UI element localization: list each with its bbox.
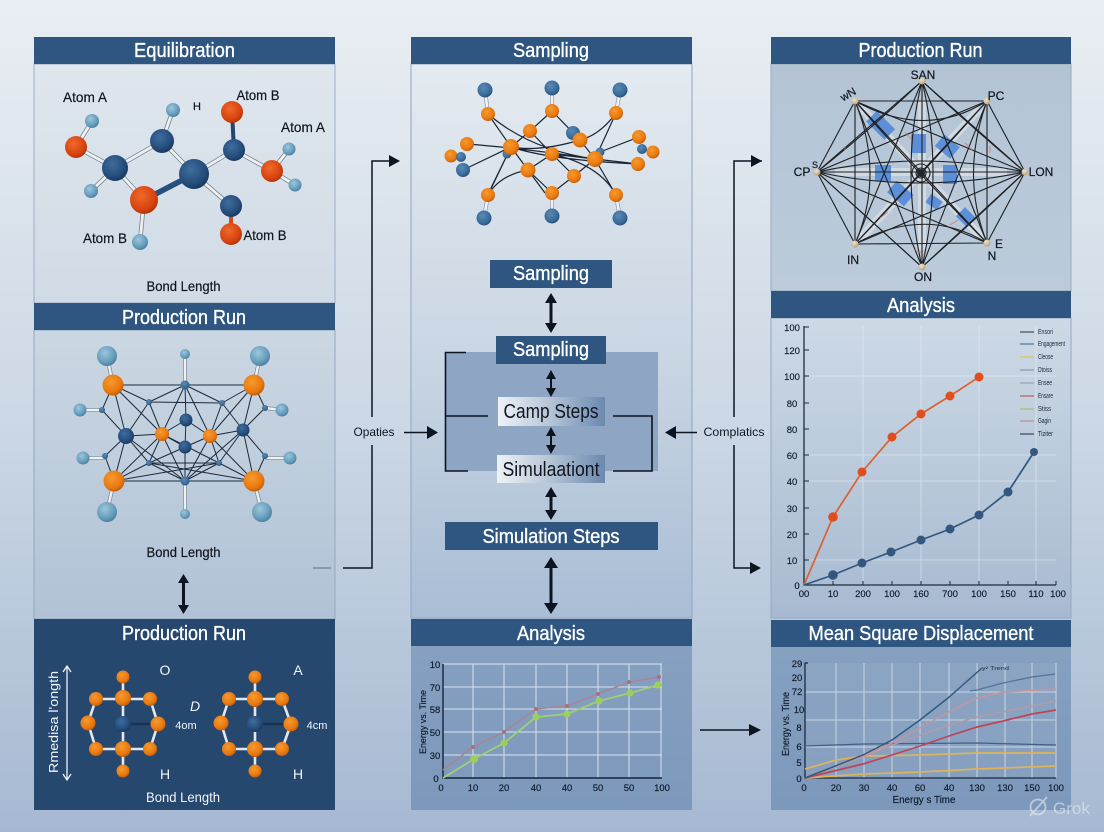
line chart: growth curves: 20 <box>787 530 797 541</box>
heading: production run right: Production Run <box>858 40 982 62</box>
network node labels: LON <box>1029 165 1053 179</box>
molecule: network cluster <box>74 346 296 522</box>
line chart: msd: 60 <box>915 783 925 794</box>
molecule: small organic <box>65 101 302 250</box>
arrow: steps to analysis <box>544 557 558 614</box>
legend: Ensee <box>1038 380 1052 387</box>
heading: equilibration: Equilibration <box>134 40 235 62</box>
block: sub-process background <box>445 352 658 471</box>
labels: dark panel: O <box>160 662 171 678</box>
panel: analysis right <box>771 291 1071 618</box>
line chart: msd: 10 <box>794 705 804 716</box>
heading: analysis center: Analysis <box>517 623 585 645</box>
network node labels: IN <box>847 253 859 267</box>
box: camp steps <box>498 397 605 426</box>
arrow: sampling to sampling <box>545 293 557 333</box>
line chart: energy vs time: 0 <box>433 774 439 785</box>
line chart: msd: 40 <box>944 783 954 794</box>
line chart: growth curves: 40 <box>787 477 797 488</box>
legend <box>1020 329 1065 438</box>
line chart: energy vs time: 0 <box>438 783 444 794</box>
line chart: growth curves: 200 <box>855 589 871 600</box>
label and arrow: complatics <box>665 425 764 439</box>
atom labels: Atom B <box>244 227 286 243</box>
watermark: grok <box>1030 797 1090 818</box>
line chart: growth curves: 100 <box>1050 589 1066 600</box>
labels: dark panel <box>46 662 327 805</box>
box: sampling upper: Sampling <box>513 263 589 285</box>
line chart: msd: 8 <box>796 723 802 734</box>
line chart: msd: 5 <box>796 758 802 769</box>
network node labels: N <box>988 249 996 263</box>
line chart: msd: 20 <box>831 783 841 794</box>
connector: production run to sampling <box>313 155 400 568</box>
labels: dark panel: H <box>160 766 170 782</box>
heading: sampling: Sampling <box>513 40 589 62</box>
legend: Ensare <box>1038 393 1053 400</box>
line chart: growth curves: 110 <box>1028 589 1044 600</box>
legend: Gagin <box>1038 418 1051 425</box>
watermark: grok: Grok <box>1053 799 1090 818</box>
line chart: growth curves: 120 <box>784 346 800 357</box>
line chart: msd: 130 <box>997 783 1013 794</box>
heading: sampling <box>411 37 692 64</box>
labels: dark panel: D <box>190 698 200 714</box>
labels: dark panel: A <box>293 662 303 678</box>
arrow: bond length double arrow <box>178 574 189 614</box>
box: camp steps: Camp Steps <box>504 401 598 423</box>
labels: dark panel: H <box>293 766 303 782</box>
line chart: growth curves: 150 <box>1000 589 1016 600</box>
line chart: msd: 30 <box>859 783 869 794</box>
arrow: sampling to camp steps <box>546 370 556 397</box>
line chart: growth curves: 100 <box>971 589 987 600</box>
box: sampling upper <box>490 260 612 288</box>
line chart: msd: 130 <box>969 783 985 794</box>
panel: production run right <box>771 37 1071 291</box>
bracket: left <box>446 352 488 471</box>
line chart: msd: 6 <box>796 742 802 753</box>
heading: analysis right <box>771 291 1071 318</box>
network: radial star <box>814 78 1028 270</box>
heading: equilibration <box>34 37 335 64</box>
panel: production run left <box>34 303 335 619</box>
atom labels: Atom B <box>236 87 280 103</box>
legend: Engagement <box>1038 341 1065 348</box>
line chart: energy vs time: Energy vs. Time <box>418 690 429 754</box>
line chart: msd: 100 <box>1048 783 1064 794</box>
label: bond length: Bond Length <box>146 544 220 560</box>
heading: production run: Production Run <box>122 307 246 329</box>
heading: production run <box>34 303 335 330</box>
line chart: msd: 0 <box>796 774 802 785</box>
arrow: simulation to steps <box>545 487 557 520</box>
network node labels: ON <box>914 270 932 284</box>
line chart: energy vs time <box>418 660 670 794</box>
heading: production run dark: Production Run <box>122 623 246 645</box>
network node labels: E <box>995 237 1003 251</box>
line chart: msd: 40 <box>887 783 897 794</box>
line chart: growth curves <box>784 323 1066 600</box>
line chart: msd: 20 <box>792 673 802 684</box>
line chart: msd: Energy s Time <box>892 794 956 806</box>
line chart: growth curves: 0 <box>794 581 800 592</box>
line chart: growth curves: 00 <box>799 589 809 600</box>
line chart: energy vs time: 10 <box>430 660 440 671</box>
line chart: energy vs time: 40 <box>531 783 541 794</box>
panel: analysis center <box>411 619 692 810</box>
labels: dark panel: Rmedisa l'ongth <box>46 671 61 773</box>
panel: sampling column <box>411 37 692 618</box>
arrow: vertical measure <box>63 666 71 780</box>
heading: mean square displacement: Mean Square Displacement <box>808 623 1034 645</box>
line chart: energy vs time: 50 <box>430 728 440 739</box>
line chart: energy vs time: 30 <box>430 751 440 762</box>
line chart: energy vs time: 10 <box>468 783 478 794</box>
line chart: growth curves: 10 <box>828 589 838 600</box>
atom labels: Bond Length <box>146 278 220 294</box>
panel: mean square displacement <box>771 620 1071 810</box>
label and arrow: complatics: Complatics <box>704 425 764 439</box>
line chart: msd: 72 <box>792 687 802 698</box>
line chart: growth curves: 80 <box>787 399 797 410</box>
molecule: sampling <box>444 80 660 226</box>
atom labels: H <box>193 101 201 113</box>
line chart: growth curves: 700 <box>942 589 958 600</box>
line chart: msd <box>780 659 1064 806</box>
label and arrow: opaties <box>354 425 438 439</box>
line chart: msd: y² Trend <box>982 666 1009 672</box>
box: simulation steps: Simulation Steps <box>482 526 620 548</box>
box: simulation: Simulaationt <box>502 459 600 481</box>
line chart: growth curves: 100 <box>784 323 800 334</box>
diagram: hexagonal molecules <box>80 670 298 778</box>
line chart: growth curves: 80 <box>787 425 797 436</box>
network node labels: CP <box>794 165 810 179</box>
line chart: msd: 150 <box>1024 783 1040 794</box>
line chart: msd: Energy vs. Time <box>780 692 792 756</box>
box: sampling lower <box>496 336 606 364</box>
network node labels: PC <box>988 89 1005 103</box>
line chart: growth curves: 100 <box>784 372 800 383</box>
line chart: energy vs time: 58 <box>430 705 440 716</box>
line chart: energy vs time: 20 <box>499 783 509 794</box>
legend: Stiss <box>1038 406 1051 413</box>
legend: Tiziter <box>1038 431 1054 438</box>
line chart: growth curves: 60 <box>787 451 797 462</box>
network node labels: SAN <box>911 68 935 82</box>
line chart: energy vs time: 40 <box>562 783 572 794</box>
labels: dark panel: 4cm <box>307 720 327 732</box>
arrow: analysis to msd <box>700 724 761 736</box>
labels: dark panel: 4om <box>175 720 197 732</box>
line chart: growth curves: 100 <box>884 589 900 600</box>
arrow: camp steps to simulation <box>546 427 556 454</box>
labels: dark panel: Bond Length <box>146 789 220 805</box>
atom labels: Atom B <box>83 230 127 246</box>
panel: production run dark <box>34 619 335 810</box>
heading: analysis center <box>411 619 692 646</box>
label and arrow: opaties: Opaties <box>354 425 394 439</box>
legend: Ensori <box>1038 329 1053 336</box>
connector: sampling to production and analysis <box>734 155 762 574</box>
network node labels: S <box>812 160 818 170</box>
line chart: energy vs time: 50 <box>593 783 603 794</box>
legend: Cleose <box>1038 354 1053 361</box>
network node labels <box>794 68 1053 284</box>
network node labels: wN <box>838 86 858 105</box>
line chart: growth curves: 10 <box>787 556 797 567</box>
legend: Dtoiss <box>1038 367 1052 374</box>
line chart: msd: 29 <box>792 659 802 670</box>
panel: equilibration <box>34 37 335 303</box>
line chart: energy vs time: 50 <box>624 783 634 794</box>
box: simulation steps <box>445 522 658 550</box>
heading: mean square displacement <box>771 620 1071 647</box>
line chart: msd: 0 <box>801 783 807 794</box>
line chart: energy vs time: 70 <box>430 683 440 694</box>
atom labels: Atom A <box>281 119 326 135</box>
line chart: growth curves: 30 <box>787 504 797 515</box>
heading: analysis right: Analysis <box>887 295 955 317</box>
atom labels: Atom A <box>63 89 108 105</box>
atom labels <box>63 87 326 294</box>
bracket: right <box>613 416 652 471</box>
line chart: growth curves: 160 <box>913 589 929 600</box>
line chart: energy vs time: 100 <box>654 783 670 794</box>
heading: production run right <box>771 37 1071 64</box>
box: sampling lower: Sampling <box>513 339 589 361</box>
